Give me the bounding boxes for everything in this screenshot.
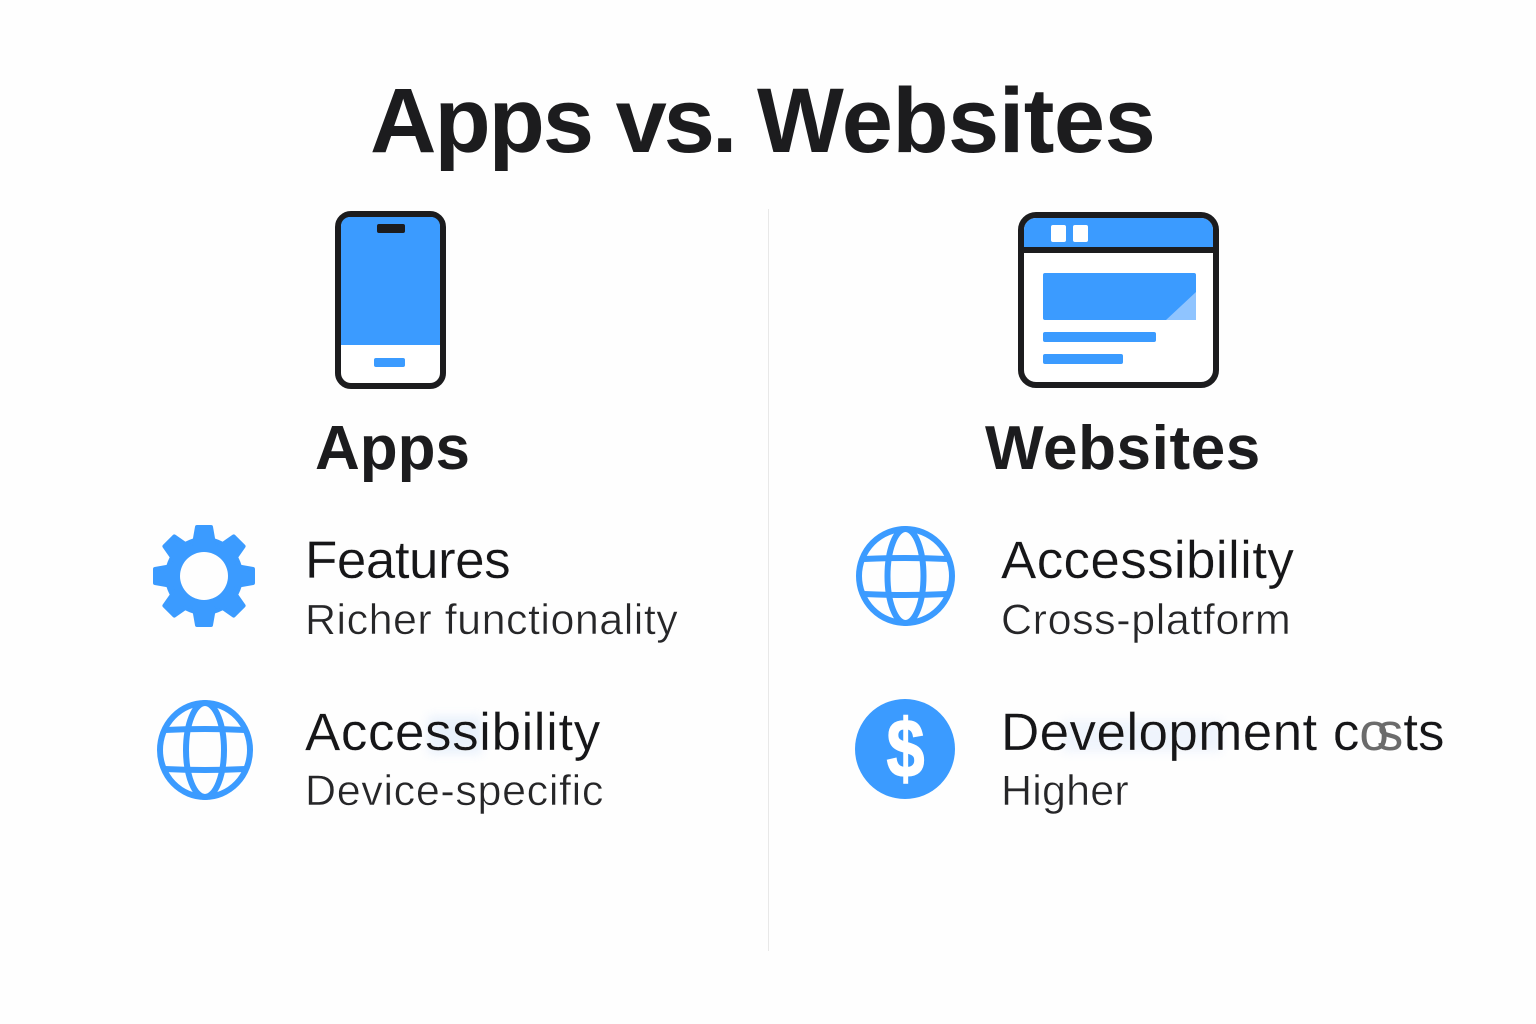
- icon: browser window: [1018, 212, 1219, 388]
- text: Accessibility: Accessibility: [1001, 531, 1294, 590]
- icon: phone: [335, 211, 446, 389]
- text: Richer functionality: Richer functionality: [305, 596, 678, 644]
- center divider: [768, 209, 769, 951]
- text: Development costs: Development costs: [1001, 703, 1445, 762]
- heading: Apps: Apps: [315, 414, 470, 483]
- text: Features: Features: [305, 531, 510, 590]
- text: Device-specific: Device-specific: [305, 767, 604, 815]
- text: Higher: Higher: [1001, 767, 1129, 815]
- heading: Websites: Websites: [985, 414, 1261, 483]
- title: Apps vs. Websites: [370, 70, 1155, 172]
- text: Accessibility: Accessibility: [305, 703, 601, 762]
- icon: dollar: $: [887, 703, 924, 796]
- text: Cross-platform: Cross-platform: [1001, 596, 1291, 644]
